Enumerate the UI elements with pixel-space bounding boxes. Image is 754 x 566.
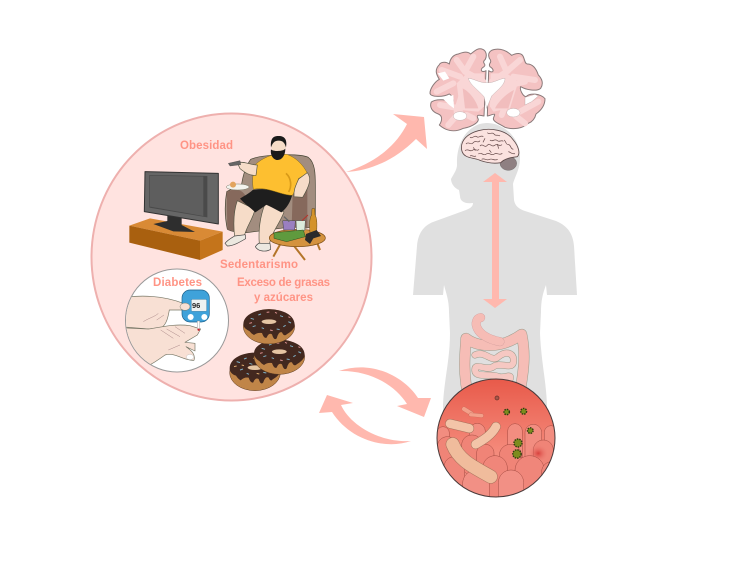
- bottle: [310, 209, 317, 233]
- label: Sedentarismo: Sedentarismo: [220, 259, 298, 271]
- right hemisphere: [487, 49, 545, 129]
- donut bottom: [230, 353, 280, 391]
- label: Exceso de grasas y azúcares: y azúcares: [254, 292, 313, 304]
- remote control: [228, 161, 241, 166]
- illustration: whole brain: [461, 129, 519, 170]
- illustration: man on armchair: [225, 136, 325, 260]
- legs: [234, 201, 255, 237]
- belly fold: [286, 173, 291, 192]
- green microbes: [504, 408, 533, 458]
- arrow: brain-gut two-way: [483, 173, 507, 308]
- glucose meter: [180, 290, 209, 331]
- head: [271, 137, 286, 155]
- black shorts: [240, 189, 292, 212]
- meter reading: 96: [192, 301, 200, 310]
- brown microbe: [495, 396, 499, 400]
- armchair: [225, 155, 315, 233]
- flip flops: [225, 235, 246, 246]
- large intestine: [465, 334, 524, 388]
- label: Obesidad: Obesidad: [180, 140, 233, 152]
- illustration: digestive tract: [465, 318, 524, 388]
- stomach: [476, 318, 500, 342]
- plate with food: [226, 184, 249, 190]
- right arm on armrest: [294, 173, 310, 197]
- donut top: [243, 309, 295, 344]
- label: Exceso de grasas y azúcares: [237, 277, 330, 304]
- hands holding glucose meter: [126, 296, 201, 364]
- raised arm: [237, 162, 257, 175]
- purple cup: [283, 221, 295, 230]
- panel: risk factors circle: [92, 114, 372, 400]
- brain folds: [465, 133, 515, 160]
- intestinal villi: [438, 423, 554, 496]
- panel: gut microbiota magnified circle: [436, 378, 556, 498]
- white matter branches: [437, 57, 483, 125]
- panel: diabetes inset: [120, 269, 228, 372]
- yellow shirt: [253, 154, 307, 195]
- bacteria rods: [450, 409, 496, 477]
- label: Diabetes: Diabetes: [153, 277, 202, 289]
- arrow: circle to microbiota: [339, 367, 431, 417]
- donut middle: [254, 340, 305, 374]
- sulcal gaps: [438, 72, 454, 108]
- coffee table: [273, 242, 320, 260]
- illustration: coronal brain section: [430, 49, 545, 131]
- arrow: risk factors to brain: [346, 114, 427, 172]
- infographic canvas: [90, 48, 577, 498]
- pizza box: [274, 230, 305, 242]
- arrow: microbiota to circle: [319, 395, 411, 444]
- icon: stack of chocolate donuts: [230, 309, 305, 391]
- ventricle: [468, 78, 505, 108]
- deep grey nuclei: [463, 88, 514, 108]
- small intestine: [475, 353, 514, 381]
- left hemisphere: [430, 49, 486, 131]
- icon: television on wooden cabinet: [129, 172, 223, 260]
- human body silhouette: [413, 123, 577, 440]
- game controller: [305, 230, 321, 244]
- label: Exceso de grasas y azúcares: Exceso de grasas: [237, 277, 330, 289]
- glass: [296, 221, 305, 231]
